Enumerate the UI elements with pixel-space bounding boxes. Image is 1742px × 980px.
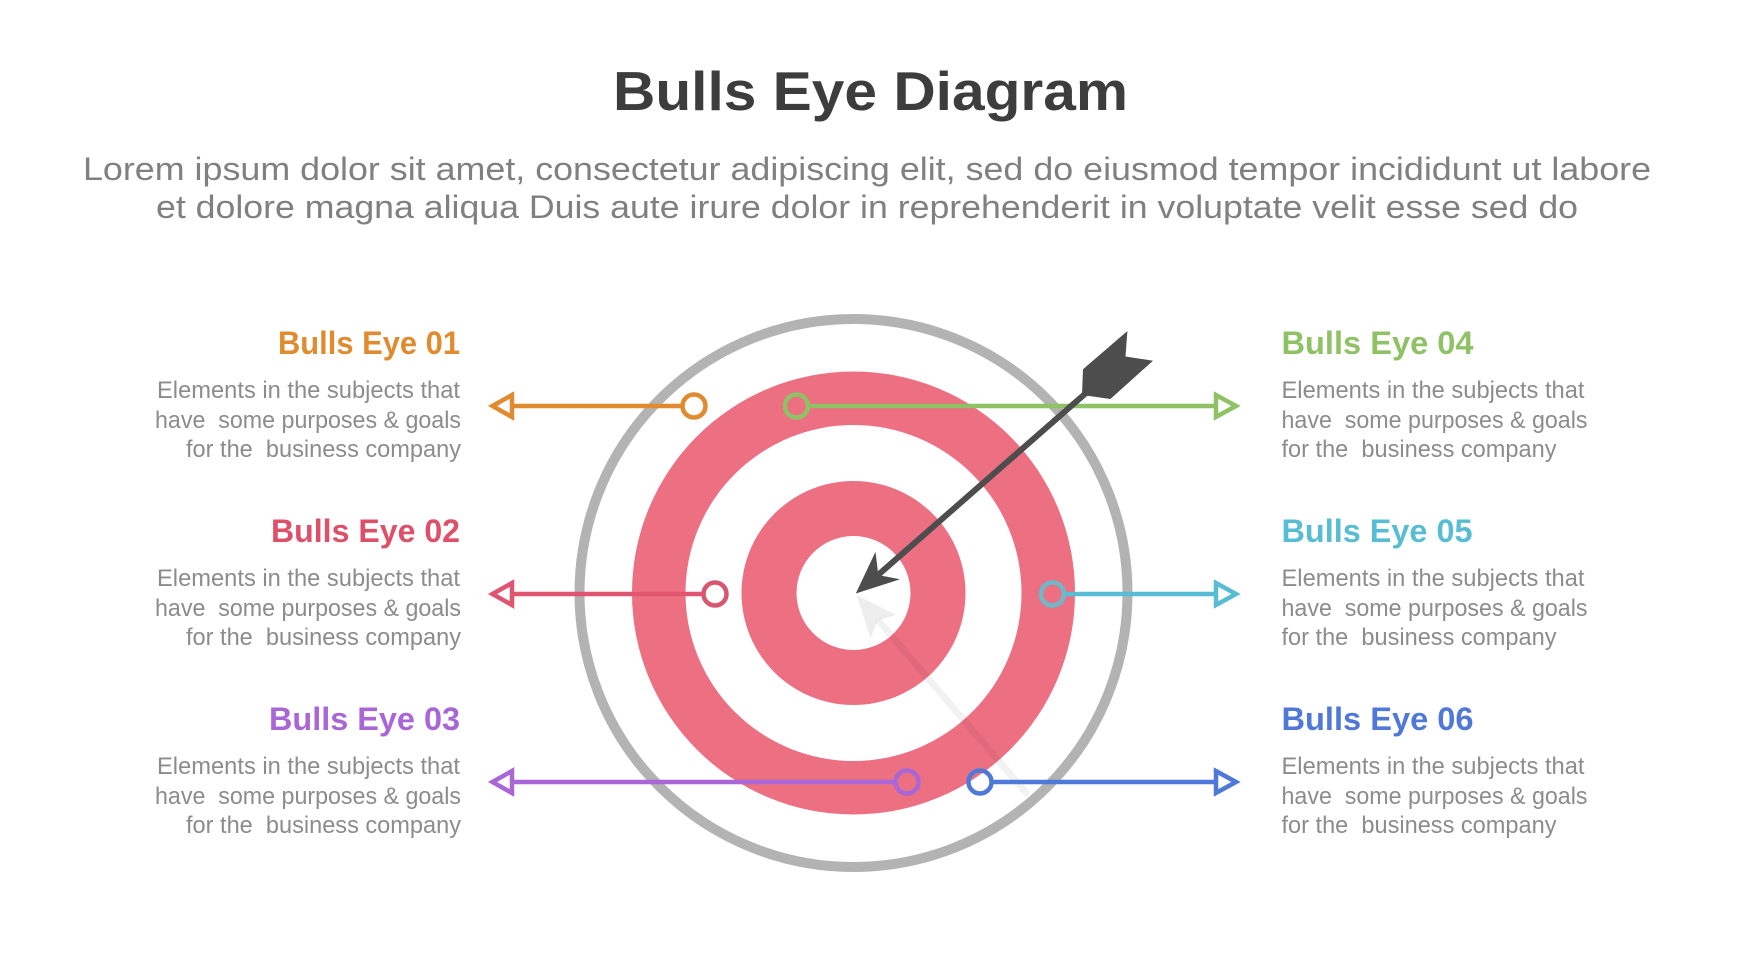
title: Bulls Eye Diagram bbox=[613, 60, 1128, 122]
bullseye target bbox=[580, 319, 1128, 867]
subtitle text: et dolore magna aliqua Duis aute irure dolor in reprehenderit in voluptate velit esse sed do bbox=[156, 189, 1578, 225]
subtitle text bbox=[83, 151, 1651, 225]
text block 05: Bulls Eye 05 bbox=[1282, 513, 1472, 549]
connector 05 cyan bbox=[1041, 582, 1236, 606]
text block 04: Elements in the subjects that bbox=[1282, 377, 1585, 404]
text block 03: for the business company bbox=[186, 812, 461, 839]
text block 01: Bulls Eye 01 bbox=[278, 325, 460, 361]
text block 05: for the business company bbox=[1282, 624, 1556, 651]
text block 03: have some purposes & goals bbox=[155, 783, 461, 810]
text block 02: Elements in the subjects that bbox=[157, 565, 460, 592]
text block 03 bbox=[155, 701, 461, 839]
text block 02: Bulls Eye 02 bbox=[271, 513, 460, 549]
connector 01 orange bbox=[492, 394, 706, 418]
connector 06 blue bbox=[968, 770, 1236, 794]
subtitle text: Lorem ipsum dolor sit amet, consectetur adipiscing elit, sed do eiusmod tempor incididunt ut labore bbox=[83, 151, 1651, 187]
text block 06 bbox=[1282, 701, 1588, 839]
text block 05: Elements in the subjects that bbox=[1282, 565, 1585, 592]
text block 06: have some purposes & goals bbox=[1282, 783, 1588, 810]
text block 05: have some purposes & goals bbox=[1282, 595, 1588, 622]
connector 04 green bbox=[785, 394, 1236, 418]
text block 04 bbox=[1282, 325, 1588, 463]
text block 02: for the business company bbox=[186, 624, 461, 651]
text block 01: for the business company bbox=[186, 436, 461, 463]
text block 05 bbox=[1282, 513, 1588, 651]
text block 04: have some purposes & goals bbox=[1282, 407, 1588, 434]
text block 01: have some purposes & goals bbox=[155, 407, 461, 434]
arrow bbox=[856, 331, 1153, 594]
arrow shadow bbox=[856, 595, 1028, 795]
text block 02: have some purposes & goals bbox=[155, 595, 461, 622]
text block 06: Elements in the subjects that bbox=[1282, 753, 1585, 780]
text block 04: Bulls Eye 04 bbox=[1282, 325, 1474, 361]
connector 03 purple bbox=[492, 770, 918, 794]
connector 02 red bbox=[492, 582, 726, 606]
text block 04: for the business company bbox=[1282, 436, 1556, 463]
text block 03: Bulls Eye 03 bbox=[269, 701, 460, 737]
text block 01: Elements in the subjects that bbox=[157, 377, 460, 404]
text block 03: Elements in the subjects that bbox=[157, 753, 460, 780]
text block 01 bbox=[155, 325, 461, 463]
text block 02 bbox=[155, 513, 461, 651]
text block 06: for the business company bbox=[1282, 812, 1556, 839]
text block 06: Bulls Eye 06 bbox=[1282, 701, 1474, 737]
